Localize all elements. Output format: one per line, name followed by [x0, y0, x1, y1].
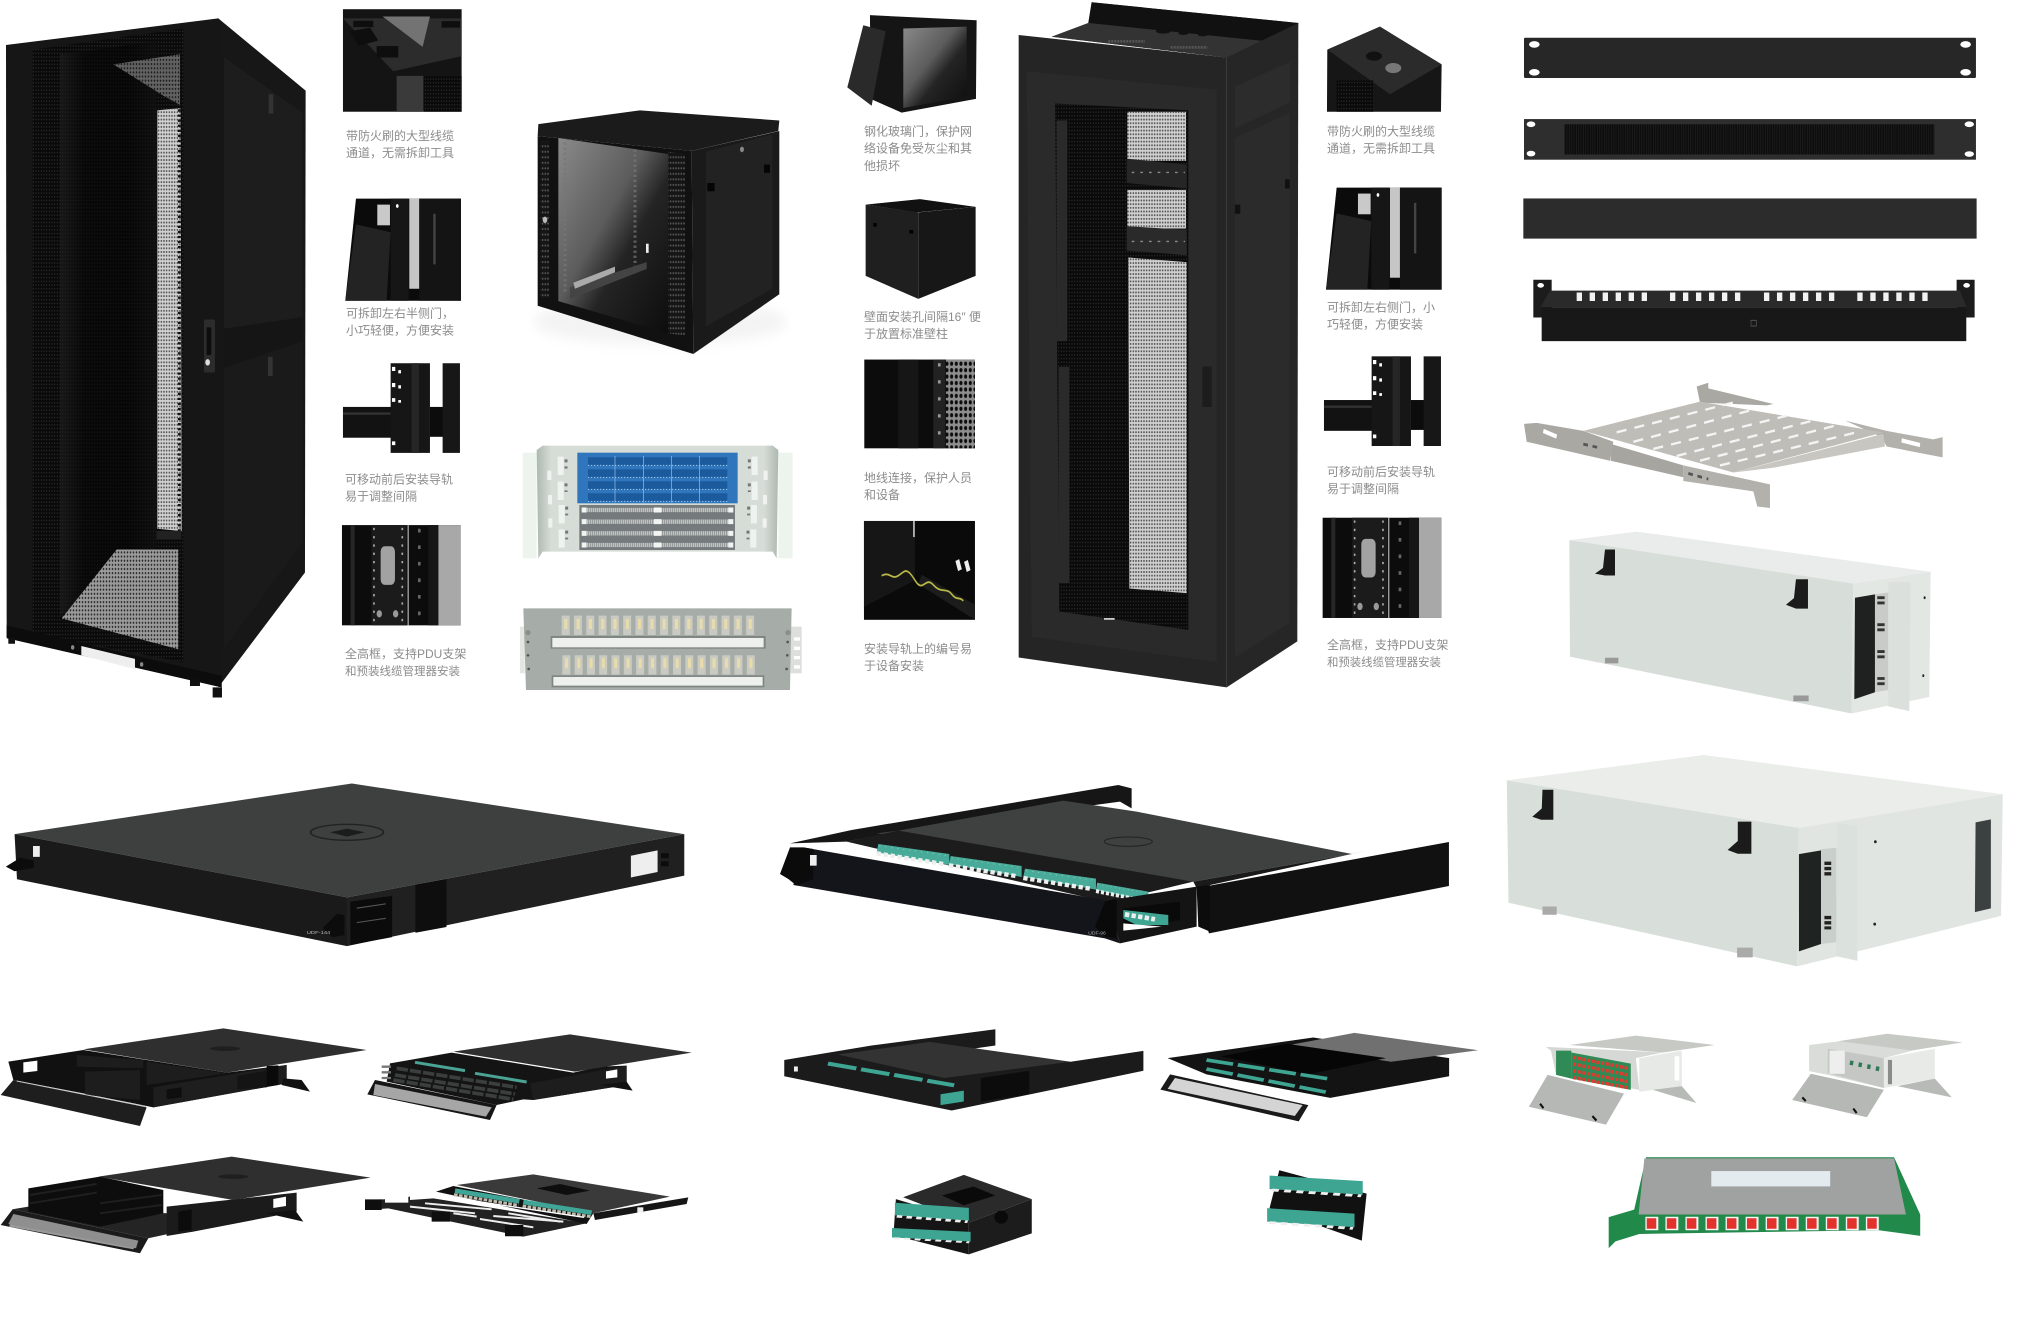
panel: tall cabinet detail – rails [1324, 356, 1441, 446]
caption: rack cable entry: 带防火刷的大型线缆 [346, 128, 454, 143]
panel: tall cabinet detail – side door [1326, 188, 1442, 290]
model label: UDF-96 [1088, 931, 1106, 937]
panel: fiber tray with teal connectors [365, 1174, 688, 1237]
gray splice rows [579, 505, 735, 550]
caption: frame [1327, 637, 1448, 669]
caption: wall mount holes: 壁面安装孔间隔16″ 便 [864, 309, 981, 324]
caption: numbered rails: 安装导轨上的编号易 [864, 641, 972, 656]
cable holders [561, 457, 755, 548]
panel: horizontal cable manager [1533, 280, 1975, 341]
rack plinth, label and feet [7, 625, 222, 698]
rack side panels [218, 18, 306, 687]
caption: movable rails: 易于调整间隔 [345, 489, 417, 504]
panel: wall cabinet detail – perforated door edge [864, 360, 975, 448]
latches [1595, 550, 1808, 609]
caption: frame: 全高框，支持PDU支架 [1327, 637, 1448, 652]
panel: green splice tray with red FC adapters [1609, 1157, 1920, 1248]
caption: movable rails: 可移动前后安装导轨 [345, 472, 453, 487]
caption: grounding [864, 470, 972, 502]
panel: light gray fiber enclosure 3U [1569, 532, 1931, 713]
caption: side door [346, 306, 454, 338]
cabinet side [1227, 23, 1298, 687]
caption: frame: 和预装线缆管理器安装 [1327, 655, 1441, 669]
caption: rails [1327, 464, 1435, 496]
caption: cable entry: 通道，无需拆卸工具 [1327, 141, 1435, 156]
panel: solid cover panel [1523, 198, 1977, 239]
panel: rack detail photo – removable side door [345, 199, 461, 301]
panel: brush strip panel [1524, 119, 1976, 160]
panel: black ODF drawer with lid opened, empty [1, 1028, 367, 1126]
caption: side door: 巧轻便，方便安装 [1327, 317, 1423, 332]
panel: tall cabinet detail – top cable entry [1327, 27, 1442, 112]
caption: full height frame: 全高框，支持PDU支架 [345, 646, 466, 661]
internal modules [77, 1055, 227, 1100]
panel: wall cabinet detail – back mounting holes [866, 199, 976, 299]
panel: rack detail photo – full height frame [342, 525, 461, 625]
caption: tempered glass door: 他损坏 [864, 159, 900, 173]
caption: side door: 可拆卸左右半侧门， [346, 306, 454, 321]
panel: light enclosure open with empty slots [1792, 1034, 1963, 1117]
cabinet side [692, 131, 779, 354]
caption: cable entry [1327, 124, 1435, 156]
panel: rack shelf tray [1524, 383, 1943, 508]
panel: tall enclosed cabinet [1019, 2, 1298, 687]
panel: rack detail photo – cable entry [343, 9, 462, 112]
panel: teal fiber cassette module [892, 1175, 1032, 1254]
caption: rails: 可移动前后安装导轨 [1327, 464, 1435, 479]
panel: tall cabinet detail – frame [1323, 518, 1441, 618]
caption: wall mount holes [864, 309, 981, 341]
cabinet top [538, 110, 779, 151]
caption: side door [1327, 300, 1435, 332]
cabinet top cowl [1052, 2, 1298, 69]
blue module block [577, 453, 738, 503]
caption: numbered rails [864, 641, 972, 673]
panel: black ODF drawer with modules [367, 1034, 692, 1120]
panel: rack detail photo – movable rails [343, 363, 460, 453]
panel: large closed black ODF drawer [6, 783, 684, 946]
caption: side door: 可拆卸左右侧门，小 [1327, 300, 1435, 315]
caption: tempered glass door: 络设备免受灰尘和其 [864, 141, 972, 156]
panel: black ODF drawer with lid and label flap [1, 1157, 371, 1253]
panel: wall cabinet detail – door removed [847, 15, 977, 113]
caption: side door: 小巧轻便，方便安装 [346, 323, 454, 338]
rack front door [6, 18, 222, 687]
module rows [382, 1062, 527, 1099]
caption: wall mount holes: 于放置标准壁柱 [864, 326, 948, 341]
panel: black drawer with flap and lid opened [1160, 1033, 1478, 1121]
panel: teal fiber adapter plate [1267, 1170, 1367, 1241]
panel: wall cabinet detail – ground wire [864, 521, 975, 620]
caption: tempered glass door [864, 124, 972, 173]
caption: movable rails [345, 472, 453, 504]
panel: blank panel with mounting holes [1524, 38, 1976, 78]
cabinet front door [1019, 35, 1227, 687]
model label: UDF-144 [307, 931, 330, 936]
panel: floor-standing server rack with perforated door [6, 18, 306, 698]
panel: light enclosure open with red connectors [1529, 1036, 1715, 1125]
caption: full height frame [345, 646, 466, 678]
panel: large light gray fiber enclosure [1507, 755, 2003, 966]
caption: numbered rails: 于设备安装 [864, 658, 924, 673]
panel: patch panel with beige connectors [520, 608, 802, 690]
panel: black drawer slid out [784, 1029, 1143, 1111]
latches [1532, 790, 1751, 854]
red adapter row [1645, 1205, 1879, 1241]
caption: rails: 易于调整间隔 [1327, 481, 1399, 496]
panel: patch panel with blue modules [523, 446, 793, 558]
panel: large black drawer pulled out with teal connectors [780, 785, 1449, 943]
caption: grounding: 地线连接，保护人员 [864, 470, 972, 485]
caption: rack cable entry [346, 128, 454, 160]
caption: tempered glass door: 钢化玻璃门，保护网 [864, 124, 972, 138]
caption: rack cable entry: 通道，无需拆卸工具 [346, 145, 454, 160]
caption: grounding: 和设备 [864, 488, 900, 502]
teal connector groups [876, 844, 1148, 902]
cabinet front with glass door [538, 136, 693, 354]
caption: cable entry: 带防火刷的大型线缆 [1327, 124, 1435, 138]
caption: full height frame: 和预装线缆管理器安装 [345, 664, 460, 678]
panel: wall-mount glass door cabinet [533, 110, 787, 354]
